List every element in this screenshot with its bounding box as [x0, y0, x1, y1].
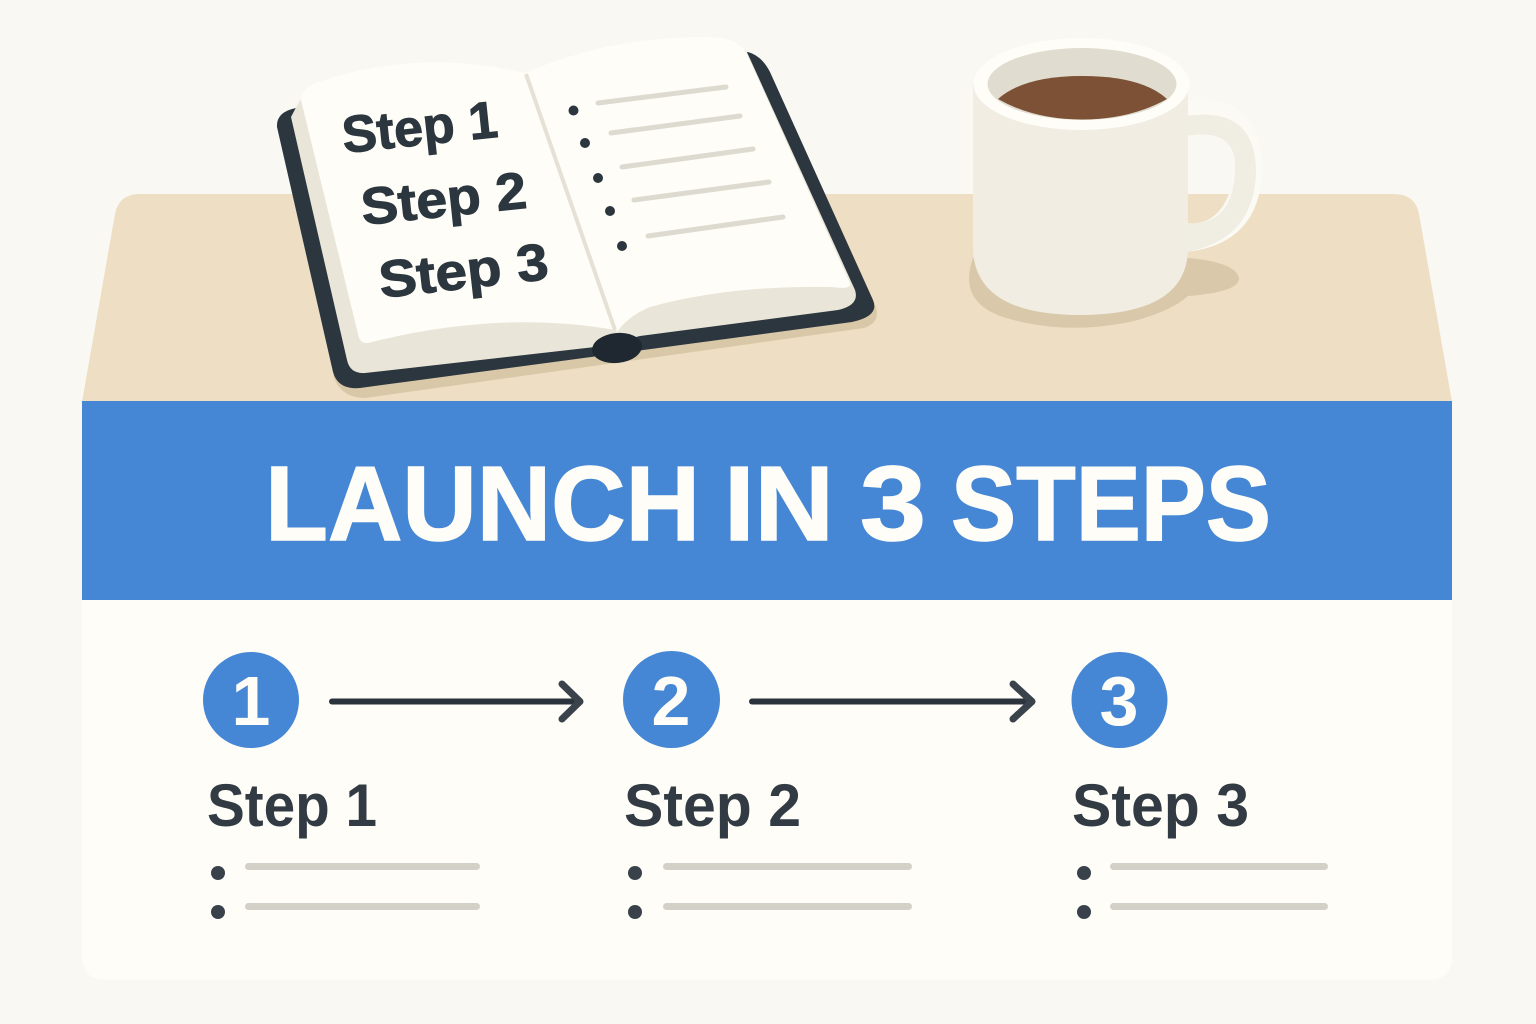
title: IN — [724, 445, 834, 563]
step 1: 1 — [232, 662, 270, 740]
title — [265, 445, 1271, 563]
desk surface — [82, 194, 1452, 402]
arrow 1 to 2 — [332, 684, 580, 719]
step 3: 3 — [1100, 662, 1138, 740]
notebook left page text: Step 2 — [358, 162, 529, 237]
coffee mug — [969, 38, 1262, 328]
lower panel — [82, 598, 1452, 980]
step 3: Step 3 — [1072, 772, 1249, 839]
notebook left page text: Step 1 — [339, 91, 500, 165]
step 2: 2 — [652, 662, 690, 740]
title banner — [82, 401, 1452, 600]
notebook right page list — [568, 87, 783, 251]
open notebook — [277, 37, 877, 398]
notebook left page text: Step 3 — [376, 233, 551, 310]
step 2 — [623, 651, 912, 919]
step 1: Step 1 — [207, 772, 377, 839]
notebook left page text — [339, 91, 551, 310]
title: 3 — [860, 445, 926, 563]
arrow 2 to 3 — [752, 684, 1032, 719]
title: LAUNCH — [265, 445, 700, 563]
step 2: Step 2 — [624, 772, 801, 839]
step 3 — [1072, 652, 1328, 919]
step 1 — [203, 652, 480, 919]
title: STEPS — [951, 445, 1271, 563]
